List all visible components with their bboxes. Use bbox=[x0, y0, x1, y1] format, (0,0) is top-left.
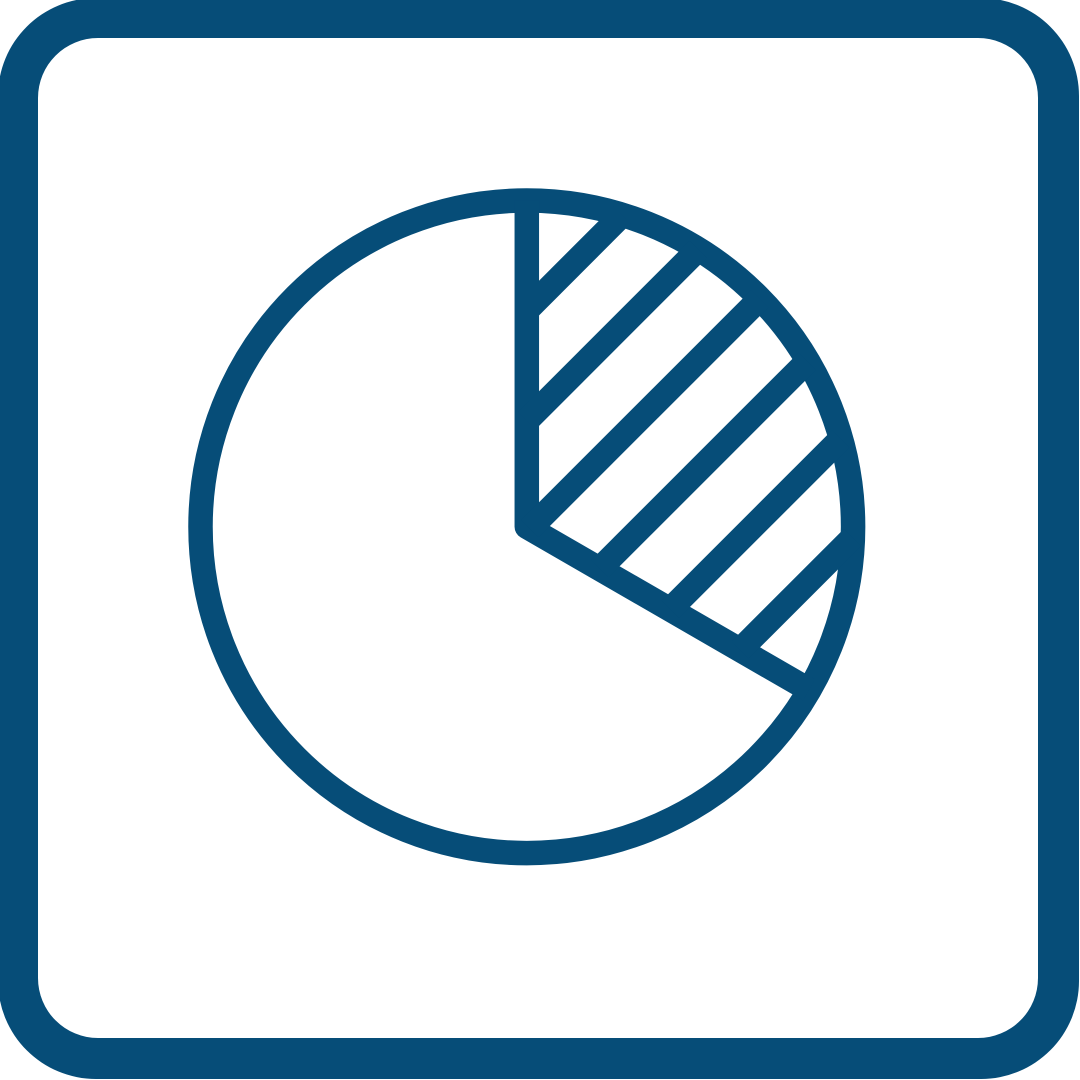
slice hatching lines bbox=[527, 215, 853, 650]
pie chart icon bbox=[201, 200, 853, 853]
pie chart outline circle bbox=[201, 201, 853, 853]
highlighted slice radii bbox=[527, 200, 809, 690]
